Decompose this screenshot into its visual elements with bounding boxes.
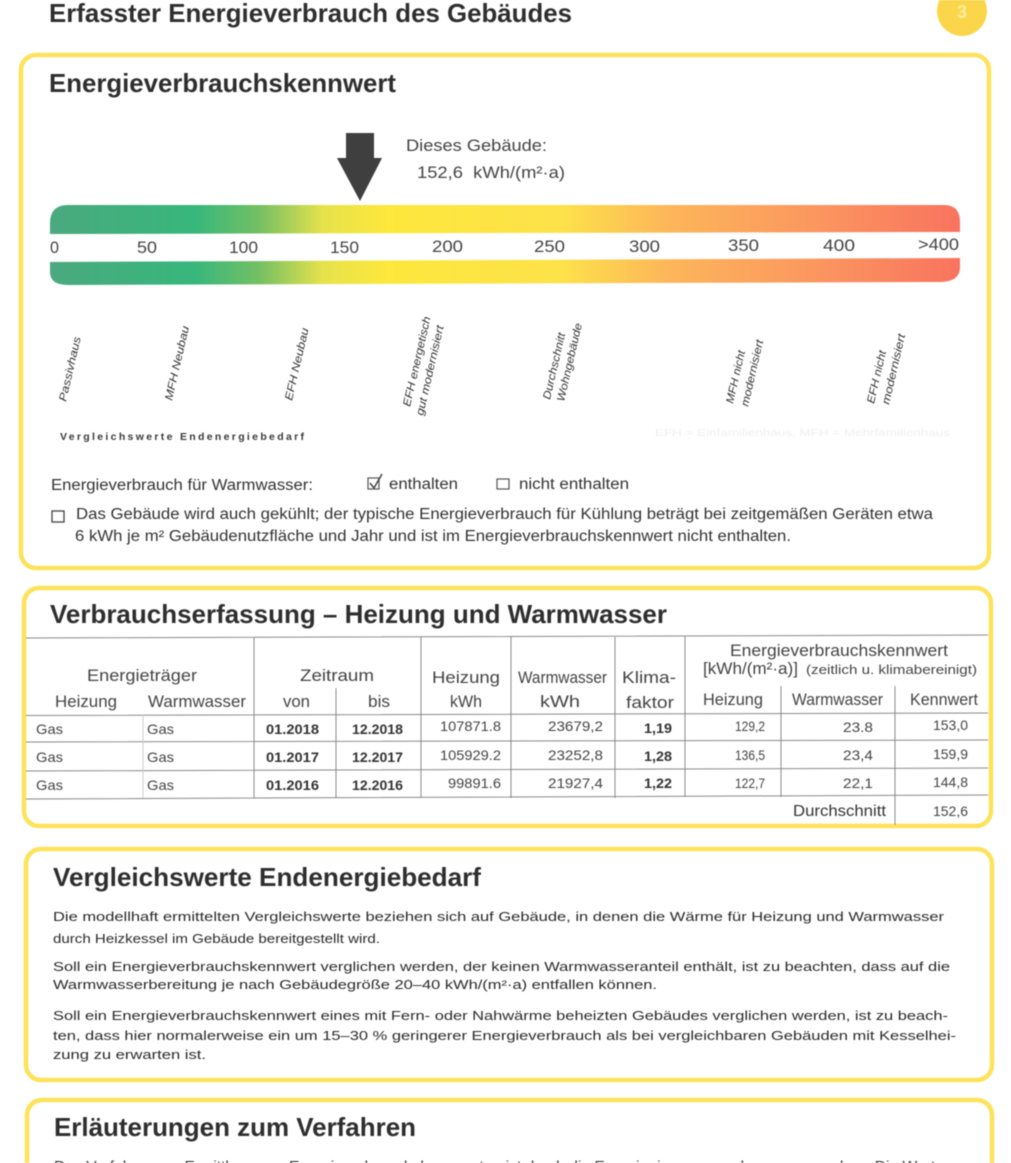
table row 2018: 153,0 xyxy=(933,717,968,733)
table row 2018: 01.2018 xyxy=(266,722,320,737)
scale numbers: 250 xyxy=(534,238,565,256)
building value callout xyxy=(406,137,565,182)
table header: kWh xyxy=(450,693,482,711)
scale numbers: 300 xyxy=(629,238,660,256)
table row 2017: Gas xyxy=(36,749,63,765)
table header: kWh xyxy=(540,693,580,711)
table header: Zeitraum xyxy=(300,667,374,685)
building value callout: 152,6 kWh/(m²·a) xyxy=(417,164,565,182)
upper colour scale bar xyxy=(50,205,960,234)
table row 2016: 21927,4 xyxy=(548,775,603,791)
scale numbers: 0 xyxy=(50,239,59,257)
table header: Kennwert xyxy=(910,691,978,709)
scale numbers: 100 xyxy=(229,239,258,257)
scale numbers: 200 xyxy=(432,238,463,256)
rotated comparison labels: MFH nicht xyxy=(724,348,748,405)
cooling note: 6 kWh je m² Gebäudenutzfläche und Jahr und ist im Energieverbrauchskennwert nicht enthalten. xyxy=(75,528,791,545)
table header: Warmwasser xyxy=(792,691,883,709)
table header: Heizung xyxy=(55,693,117,711)
table row 2018: 23679,2 xyxy=(548,718,603,734)
table row 2017: 01.2017 xyxy=(266,750,319,765)
rotated comparison labels: modernisiert xyxy=(739,338,766,408)
section number badge: 3 xyxy=(957,2,967,22)
table row 2018: 107871.8 xyxy=(440,718,501,734)
panel: Vergleichswerte Endenergiebedarf xyxy=(26,849,992,1080)
table header: Warmwasser xyxy=(518,669,607,687)
lower colour scale bar xyxy=(50,258,960,285)
rotated comparison labels: EFH energetisch xyxy=(401,315,434,408)
paragraph 3: ten, dass hier normalerweise ein um 15–30 % geringerer Energieverbrauch als bei vergleichbaren Gebäuden mit Kesselhei- xyxy=(53,1028,956,1043)
hot water row: nicht enthalten xyxy=(519,476,629,493)
rotated comparison labels: Passivhaus xyxy=(57,335,84,403)
table row 2016 xyxy=(36,774,968,793)
scale numbers: 150 xyxy=(330,239,359,257)
table row 2017: 1,28 xyxy=(644,749,673,764)
table header: (zeitlich u. klimabereinigt) xyxy=(806,663,977,677)
table row 2018: 23.8 xyxy=(843,719,873,735)
section number badge xyxy=(937,0,987,36)
paragraph 1: Die modellhaft ermittelten Vergleichswerte beziehen sich auf Gebäude, in denen die Wärme für Heizung und Warmwasser xyxy=(53,909,945,924)
table row 2017: Gas xyxy=(147,749,174,765)
faint abbreviation note: EFH = Einfamilienhaus, MFH = Mehrfamilienhaus xyxy=(655,428,950,439)
paragraph 2: Warmwasserbereitung je nach Gebäudegröße 20–40 kWh/(m²·a) entfallen können. xyxy=(53,977,657,992)
panel heading: Energieverbrauchskennwert xyxy=(49,68,396,98)
paragraph 3: Soll ein Energieverbrauchskennwert eines mit Fern- oder Nahwärme beheizten Gebäudes verglichen werden, ist zu beach- xyxy=(53,1008,948,1023)
table row 2018: Gas xyxy=(147,721,174,737)
scale numbers xyxy=(50,236,959,257)
panel: Erläuterungen zum Verfahren xyxy=(27,1100,992,1163)
scale numbers: 350 xyxy=(728,237,759,255)
table header xyxy=(55,642,978,712)
table row 2017 xyxy=(36,746,968,765)
rotated comparison labels: gut modernisiert xyxy=(414,323,447,417)
rotated comparison labels: Wohngebäude xyxy=(555,322,585,403)
table header: Warmwasser xyxy=(148,693,247,711)
table row 2016: 01.2016 xyxy=(266,778,320,793)
scale numbers: >400 xyxy=(918,236,959,254)
table row 2016: 12.2016 xyxy=(352,778,403,793)
hot water row xyxy=(51,474,629,494)
paragraph 3 xyxy=(53,1008,956,1062)
scale numbers: 400 xyxy=(823,237,855,255)
table row 2017: 136,5 xyxy=(735,747,765,763)
table row 2016: 1,22 xyxy=(644,776,672,791)
paragraph 2 xyxy=(53,959,950,992)
table header: [kWh/(m²·a)] xyxy=(703,660,798,678)
table row 2017: 159,9 xyxy=(933,746,968,762)
table header: Energieträger xyxy=(87,667,198,685)
paragraph 1 xyxy=(53,909,945,946)
panel heading: Vergleichswerte Endenergiebedarf xyxy=(53,862,481,892)
table row 2016: 122,7 xyxy=(735,775,765,791)
table header: Energieverbrauchskennwert xyxy=(730,642,948,660)
scale numbers: 50 xyxy=(137,239,157,257)
average row: Durchschnitt xyxy=(793,803,887,820)
cooling note xyxy=(52,506,933,545)
table row 2016: Gas xyxy=(36,777,63,793)
table row 2017: 23252,8 xyxy=(548,747,603,763)
table row 2017: 105929.2 xyxy=(440,747,501,763)
table row 2016: 144,8 xyxy=(933,774,968,790)
panel heading: Verbrauchserfassung – Heizung und Warmwasser xyxy=(50,599,667,629)
table row 2018: Gas xyxy=(36,721,63,737)
panel: Energieverbrauchskennwert xyxy=(21,55,989,568)
table header: Klima- xyxy=(622,669,676,687)
rotated comparison labels: EFH Neubau xyxy=(283,327,312,402)
rotated comparison labels: Durchschnitt xyxy=(541,331,568,401)
table row 2018 xyxy=(36,717,968,737)
table row 2017: 23,4 xyxy=(843,747,873,763)
table row 2017: 12.2017 xyxy=(352,750,403,765)
average row: 152,6 xyxy=(933,803,968,819)
building value callout: Dieses Gebäude: xyxy=(406,137,547,155)
paragraph 1: durch Heizkessel im Gebäude bereitgestellt wird. xyxy=(53,931,380,946)
panel: Verbrauchserfassung xyxy=(24,588,991,826)
table row 2016: 22,1 xyxy=(843,775,873,791)
cooling note: Das Gebäude wird auch gekühlt; der typische Energieverbrauch für Kühlung beträgt bei zeitgemäßen Geräten etwa xyxy=(76,506,933,523)
panel heading: Erläuterungen zum Verfahren xyxy=(54,1112,416,1142)
table header: Heizung xyxy=(432,669,500,687)
hot water row: enthalten xyxy=(389,476,458,493)
average row xyxy=(793,803,968,820)
rotated comparison labels: modernisiert xyxy=(880,332,908,406)
paragraph 3: zung zu erwarten ist. xyxy=(53,1047,206,1062)
rotated comparison labels: EFH nicht xyxy=(865,348,889,405)
rotated comparison labels xyxy=(57,315,908,417)
table header: faktor xyxy=(626,694,675,712)
table header: bis xyxy=(368,693,390,711)
consumption table xyxy=(26,635,988,825)
table row 2018: 129,2 xyxy=(735,718,765,734)
table row 2016: Gas xyxy=(147,777,174,793)
table header: Heizung xyxy=(703,691,763,709)
rotated comparison labels: MFH Neubau xyxy=(163,325,192,402)
icon: building marker arrow xyxy=(337,133,382,201)
hot water row: Energieverbrauch für Warmwasser: xyxy=(51,477,313,494)
table header: von xyxy=(283,693,310,711)
table row 2018: 12.2018 xyxy=(352,722,403,737)
table row 2016: 99891.6 xyxy=(448,775,501,791)
table row 2018: 1,19 xyxy=(644,721,672,736)
paragraph 2: Soll ein Energieverbrauchskennwert verglichen werden, der keinen Warmwasseranteil enthält, ist zu beachten, dass auf die xyxy=(53,959,950,974)
comparison caption: Vergleichswerte Endenergiebedarf xyxy=(60,431,305,443)
